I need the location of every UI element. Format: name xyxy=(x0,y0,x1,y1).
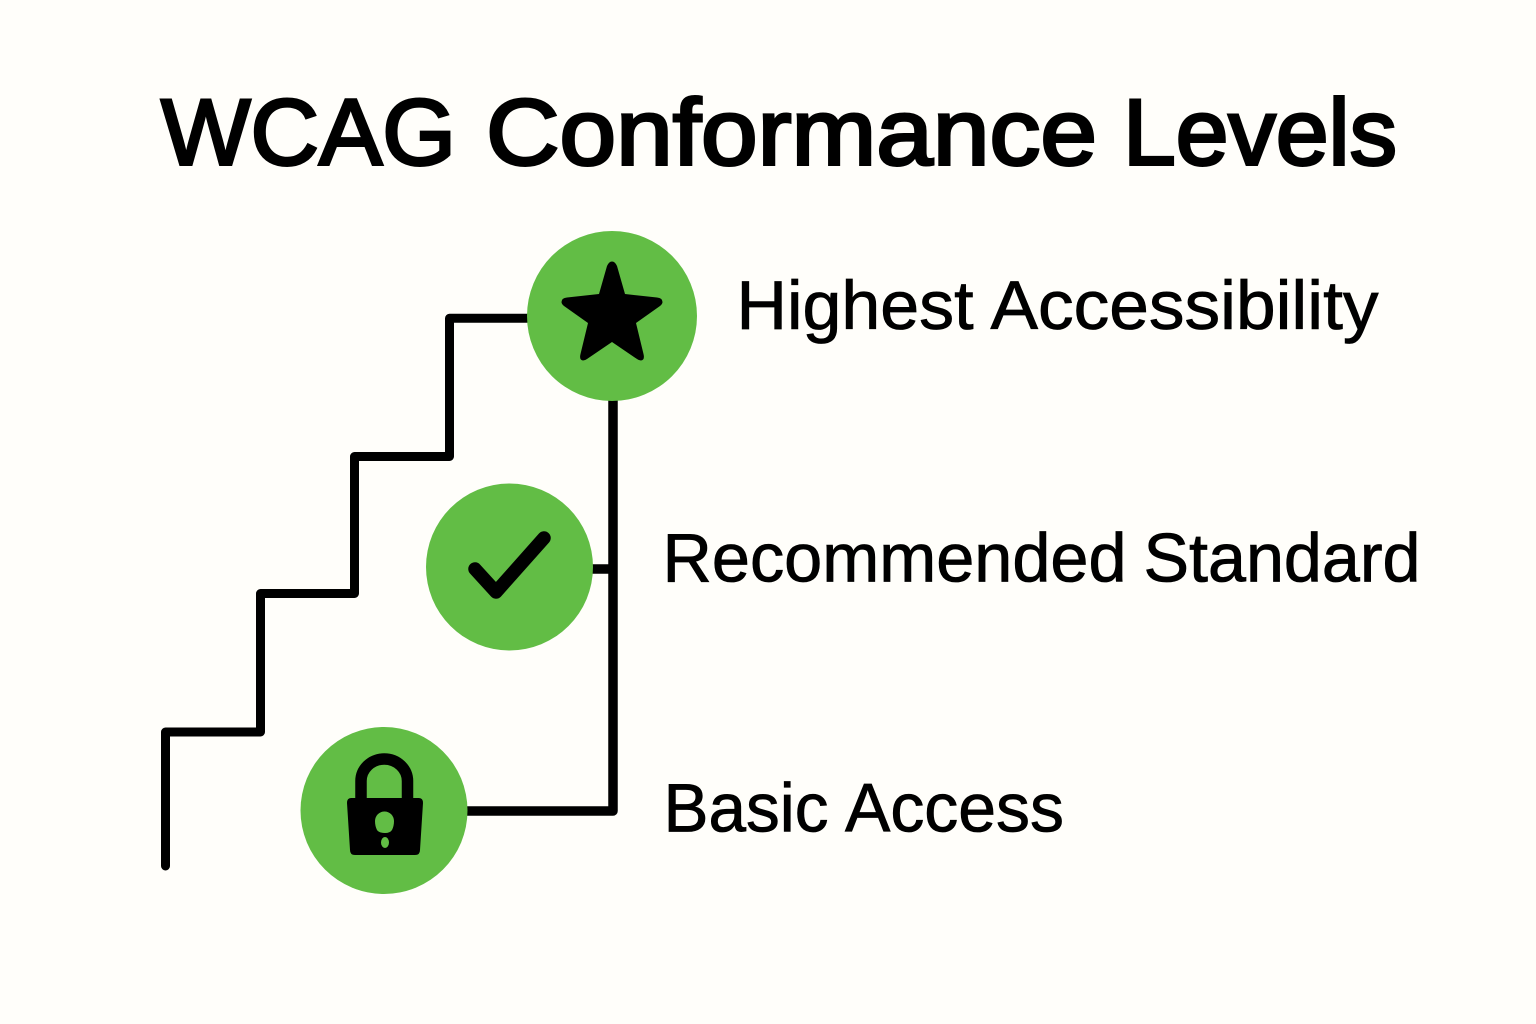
label: highest accessibility xyxy=(736,267,1379,344)
label: basic access xyxy=(664,770,1064,846)
title: Levels xyxy=(1123,80,1397,184)
title xyxy=(161,80,1397,184)
label: highest accessibility: Highest xyxy=(736,267,974,344)
label: basic access: Basic xyxy=(664,770,828,846)
icon: padlock badge xyxy=(300,727,468,894)
title: WCAG xyxy=(161,80,456,184)
label: recommended standard xyxy=(662,520,1420,596)
vertical connector xyxy=(466,398,613,811)
staircase line xyxy=(166,318,530,866)
label: highest accessibility: Accessibility xyxy=(990,267,1379,344)
label: basic access: Access xyxy=(845,770,1064,846)
label: recommended standard: Standard xyxy=(1144,520,1420,596)
label: recommended standard: Recommended xyxy=(662,520,1126,596)
title: Conformance xyxy=(486,80,1097,184)
icon: star badge xyxy=(527,231,697,401)
icon: check badge xyxy=(426,484,593,650)
